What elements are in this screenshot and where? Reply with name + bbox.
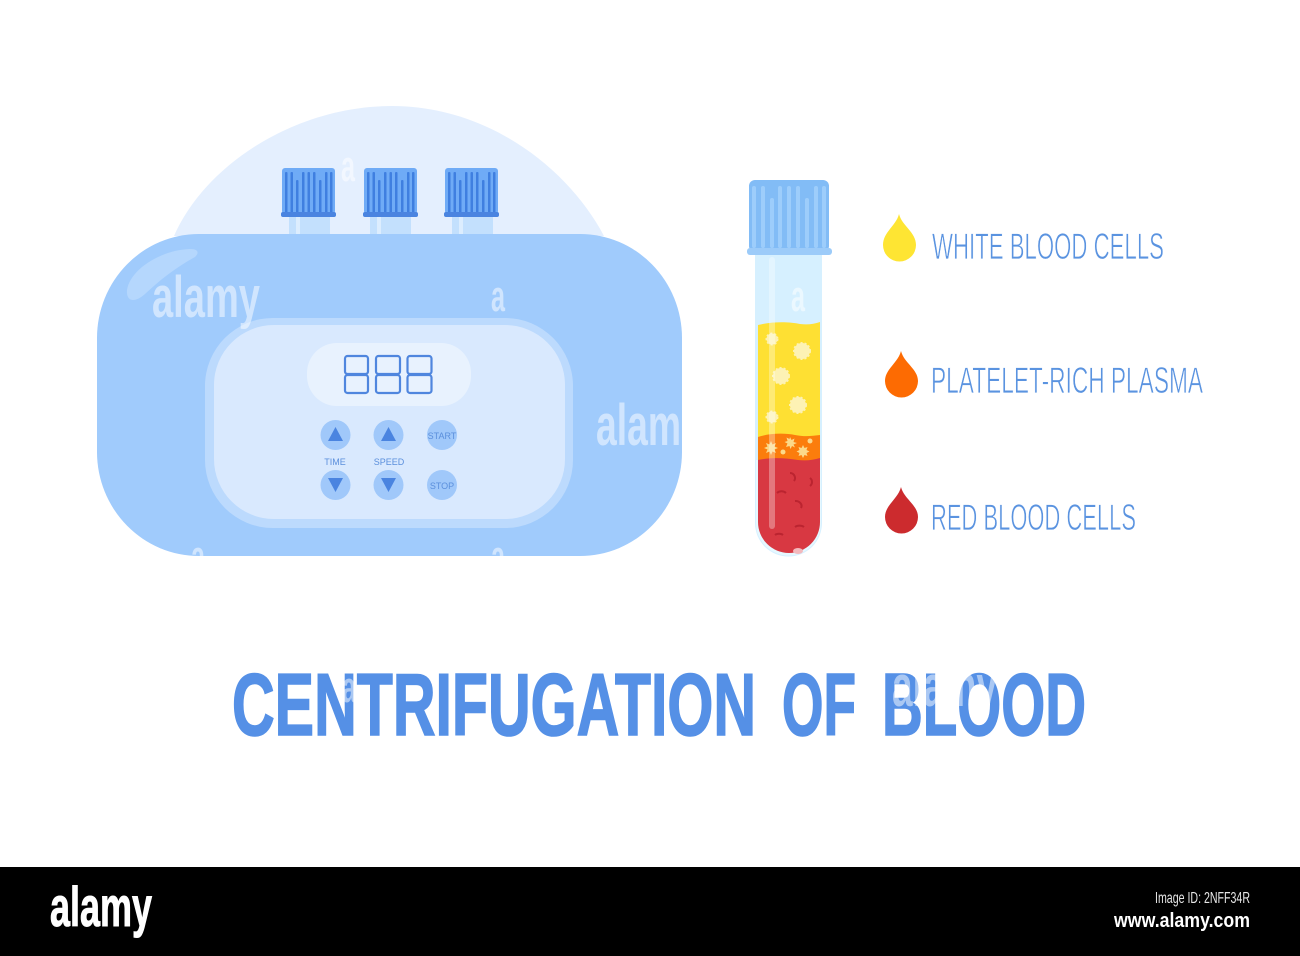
watermarks: alam [596,393,681,458]
control buttons: START [428,431,457,441]
title: BLOOD [882,655,1086,754]
bottom highlight [793,548,803,554]
watermarks: a [791,272,805,321]
platelet-rich plasma legend item [885,351,1203,401]
website: www.alamy.com [1113,910,1250,932]
control buttons: TIME [324,457,346,467]
platelets [764,437,812,458]
footer logo: alamy [50,875,152,938]
glass dome lid [174,106,604,236]
tube cap 1 [281,168,336,217]
orange platelet layer [758,434,820,462]
tube cap 3 [444,168,499,217]
watermarks: a [341,142,355,191]
digital display [307,343,471,406]
blue tube cap [747,180,832,255]
white blood cells legend item [883,214,1164,267]
watermarks: alamy [892,654,997,719]
test tube with separated blood [747,180,832,556]
glass tube [755,250,822,556]
red blood cells legend item [885,487,1136,538]
title: OF [782,655,856,754]
image id: Image ID: 2NFF34R [1155,890,1250,907]
watermarks: a [491,272,505,321]
watermarks [152,142,997,719]
tube reflection [769,257,775,529]
sample tubes in centrifuge [289,216,493,236]
centrifuge machine [97,106,682,556]
legend [883,214,1203,538]
watermarks: a [491,532,505,581]
body highlight [127,249,198,300]
red blood cells [775,473,812,535]
control buttons [320,420,457,500]
control buttons: STOP [430,481,454,491]
tube cap 2 [363,168,418,217]
footer bar [0,867,1300,956]
watermarks: a [342,663,356,712]
red blood cells legend item: RED BLOOD CELLS [931,497,1136,538]
control buttons: SPEED [374,457,405,467]
title: CENTRIFUGATION [232,655,756,754]
yellow plasma layer [758,322,820,440]
white blood cells [766,334,810,422]
machine body [97,234,682,556]
red blood layer [758,458,820,553]
watermarks: a [191,532,205,581]
control panel [205,318,573,528]
tube rim [756,460,821,556]
watermarks: alamy [152,265,260,330]
